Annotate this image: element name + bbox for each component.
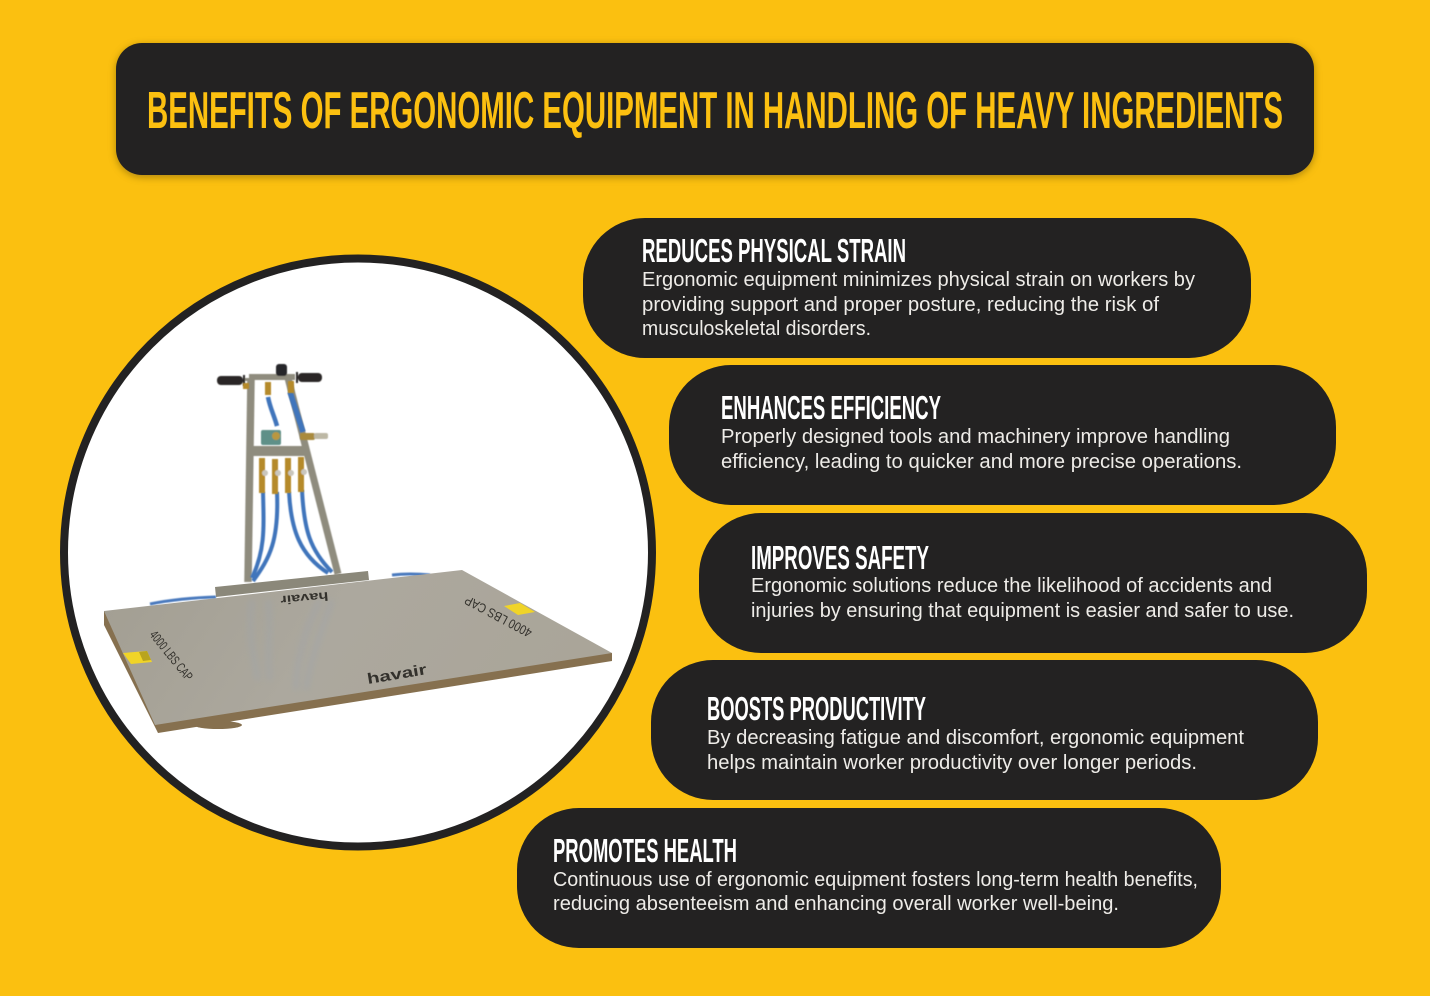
hoses xyxy=(252,392,332,581)
frame xyxy=(217,364,338,582)
plate lettering: havair xyxy=(366,661,428,688)
icon: blue hose behind plate xyxy=(150,574,430,604)
panel: boosts productivity xyxy=(651,660,1318,800)
stickers xyxy=(123,603,535,664)
panel: improves safety xyxy=(699,513,1367,653)
panel: promotes health: reducing absenteeism and enhancing overall worker well-being. xyxy=(553,892,1119,915)
panel: promotes health: Continuous use of ergonomic equipment fosters long-term health benefits, xyxy=(553,868,1198,891)
valves xyxy=(243,381,307,494)
plate lettering: havair xyxy=(279,589,329,607)
photo circle: ergonomic air-lift equipment xyxy=(64,258,652,846)
panel: improves safety: injuries by ensuring that equipment is easier and safer to use. xyxy=(751,599,1294,622)
plate edge xyxy=(104,611,612,733)
panel: enhances efficiency: efficiency, leading to quicker and more precise operations. xyxy=(721,450,1242,473)
title banner xyxy=(116,43,1314,177)
panel: reduces physical strain: musculoskeletal disorders. xyxy=(642,317,871,340)
panel: boosts productivity: By decreasing fatigue and discomfort, ergonomic equipment xyxy=(707,726,1244,749)
plate lettering: 4000 LBS CAP xyxy=(462,593,534,641)
panel: reduces physical strain: REDUCES PHYSICAL STRAIN xyxy=(642,232,906,269)
panel: enhances efficiency: Properly designed tools and machinery improve handling xyxy=(721,425,1230,448)
panel: enhances efficiency xyxy=(669,365,1336,505)
panel: improves safety: Ergonomic solutions reduce the likelihood of accidents and xyxy=(751,574,1272,597)
panel: reduces physical strain xyxy=(583,218,1251,358)
panel: reduces physical strain: providing support and proper posture, reducing the risk of xyxy=(642,293,1159,316)
panel: reduces physical strain: Ergonomic equipment minimizes physical strain on workers by xyxy=(642,268,1196,291)
plate lettering: 4000 LBS CAP xyxy=(147,627,196,684)
plate top xyxy=(104,570,612,725)
panel: boosts productivity: helps maintain worker productivity over longer periods. xyxy=(707,751,1197,774)
panel: promotes health xyxy=(517,808,1221,948)
plate lettering xyxy=(147,589,534,688)
panel: promotes health: PROMOTES HEALTH xyxy=(553,832,737,869)
hose reflections on plate xyxy=(250,600,332,690)
panel: improves safety: IMPROVES SAFETY xyxy=(751,539,929,576)
plate support pad xyxy=(194,721,242,729)
panel: boosts productivity: BOOSTS PRODUCTIVITY xyxy=(707,690,926,727)
panel: enhances efficiency: ENHANCES EFFICIENCY xyxy=(721,389,941,426)
solenoid and side fitting xyxy=(261,430,328,445)
cross beam xyxy=(215,571,369,597)
